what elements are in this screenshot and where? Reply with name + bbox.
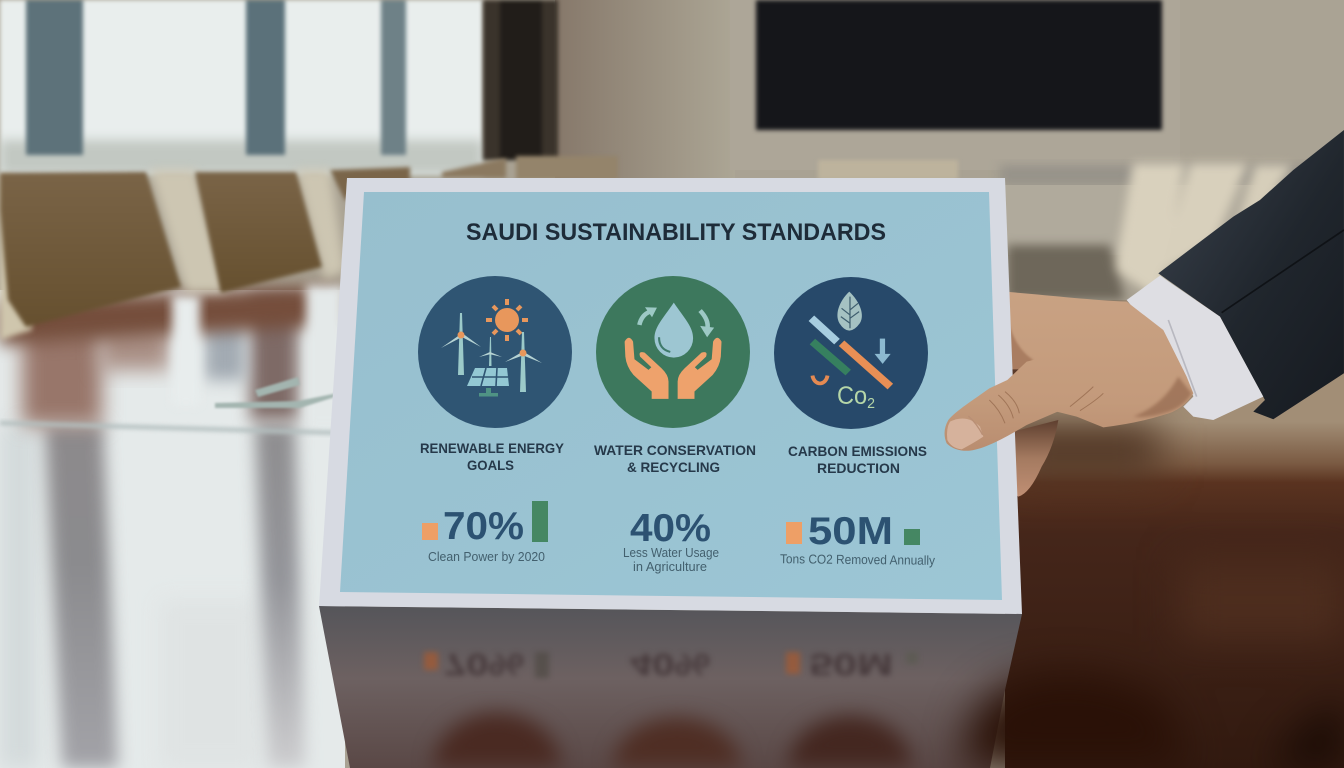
heading: renewable energy bbox=[420, 440, 565, 473]
icon: recycling arrows bbox=[639, 307, 714, 337]
background: table surface bbox=[0, 290, 1344, 768]
thumb over the card bbox=[945, 358, 1103, 451]
icon: solar panel bbox=[467, 368, 509, 396]
heading: renewable energy: RENEWABLE ENERGY bbox=[420, 440, 565, 456]
heading: carbon emissions: CARBON EMISSIONS bbox=[788, 443, 927, 459]
heading: renewable energy: GOALS bbox=[467, 457, 514, 473]
stat: 50M tons CO2 removed: 50M bbox=[808, 510, 893, 553]
stat: 40 percent less water: in Agriculture bbox=[633, 559, 707, 574]
icon: leaf bbox=[837, 292, 862, 331]
stat: 40 percent less water: Less Water Usage bbox=[623, 545, 719, 560]
stat: 70 percent clean power: Clean Power by 2020 bbox=[428, 549, 545, 564]
heading: water conservation bbox=[594, 442, 756, 475]
background: curtain bbox=[483, 0, 558, 160]
card white border bbox=[319, 178, 1022, 614]
stat: 70 percent clean power bbox=[422, 501, 548, 564]
icon: renewable energy circle bbox=[418, 276, 572, 428]
reflected circles bbox=[433, 713, 912, 768]
icon: diagonal bars bbox=[811, 318, 890, 387]
reflected statistic numbers: 70% bbox=[444, 647, 524, 681]
reflected statistic numbers: 40% bbox=[630, 647, 710, 681]
icon: carbon reduction circle bbox=[774, 277, 928, 429]
reflected orange bars bbox=[424, 652, 918, 678]
heading: carbon emissions: REDUCTION bbox=[817, 460, 900, 476]
panel: printed card bbox=[319, 178, 1022, 614]
icon: water drop bbox=[654, 303, 693, 358]
CO2 label: 2 bbox=[867, 395, 875, 412]
card blue face bbox=[340, 192, 1002, 600]
hand holding the card bbox=[1005, 292, 1193, 497]
reflected statistic numbers bbox=[444, 647, 893, 681]
icon: orange arc bbox=[812, 376, 828, 383]
white shirt cuff bbox=[1127, 276, 1263, 420]
background: windows bbox=[0, 0, 483, 175]
CO2 label: Co bbox=[837, 382, 869, 410]
stat: 70 percent clean power: 70% bbox=[443, 505, 524, 548]
stat: 40 percent less water bbox=[623, 507, 719, 574]
icon: down arrow bbox=[875, 339, 891, 364]
icon: sun bbox=[486, 299, 528, 341]
stat: 50M tons CO2 removed bbox=[780, 510, 936, 568]
reflection of the card on the table bbox=[319, 606, 1022, 768]
reflected statistic numbers: 50M bbox=[809, 647, 893, 681]
icon: cupped hands bbox=[625, 338, 722, 399]
sleeve of dark suit jacket bbox=[1158, 130, 1344, 419]
stat: 50M tons CO2 removed: Tons CO2 Removed Annually bbox=[780, 551, 936, 568]
background: right chairs bbox=[1007, 163, 1292, 300]
back of hand bbox=[1005, 292, 1193, 427]
table reflections: window bands bbox=[0, 285, 345, 768]
heading: water conservation: WATER CONSERVATION bbox=[594, 442, 756, 458]
heading: water conservation: & RECYCLING bbox=[627, 459, 720, 475]
icon: wind turbines bbox=[441, 313, 542, 392]
heading: carbon emissions bbox=[788, 443, 927, 476]
icon: water conservation circle bbox=[596, 276, 750, 428]
background: left chairs bbox=[0, 156, 958, 340]
title: SAUDI SUSTAINABILITY STANDARDS bbox=[466, 219, 886, 246]
lower fingers behind card bbox=[1007, 420, 1058, 497]
stat: 40 percent less water: 40% bbox=[630, 507, 711, 550]
table shadow: hand reflection bbox=[965, 425, 1344, 768]
wall-mounted TV screen bbox=[756, 0, 1162, 130]
